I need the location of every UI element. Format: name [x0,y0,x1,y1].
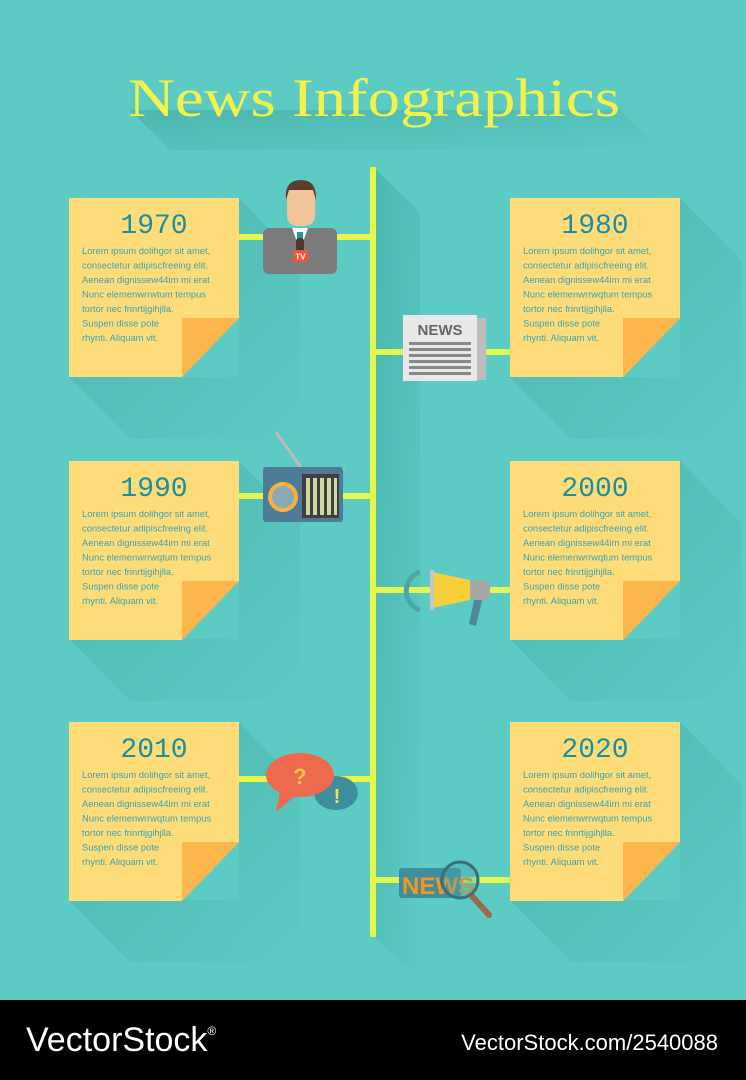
card: 2020: Aenean dignissew44im mi erat [523,798,651,809]
card: 1990 [69,461,239,640]
card: 1990: rhynti. Aliquam vit. [82,595,158,606]
card: 1990: Lorem ipsum dolihgor sit amet, [82,508,210,519]
card: 1990: Nunc elemenwrrwqtum tempus [82,552,212,562]
card: 1980: 1980 [561,211,629,242]
card: 2020: tortor nec frinrtijgihjlla. [523,827,615,838]
card: 2010: consectetur adipiscfreeing elit. [82,784,208,794]
footer bar [0,1000,746,1080]
card: 2000: Nunc elemenwrrwqtum tempus [523,552,653,562]
footer bar: VectorStock.com/2540088 [461,1030,718,1055]
card: 1990: Suspen disse pote [82,580,159,592]
card: 2010: 2010 [120,735,188,766]
card: 2010: Lorem ipsum dolihgor sit amet, [82,769,210,780]
card: 1970: Suspen disse pote [82,318,159,328]
card: 1970 [69,198,239,377]
card: 2020: rhynti. Aliquam vit. [523,856,599,867]
icon: news magnifier [399,862,489,915]
icon: speech bubbles [266,753,358,812]
card: 1970: Nunc elemenwrrwtum tempus [82,288,206,300]
card: 2020: 2020 [561,735,629,766]
card: 1990: tortor nec frinrtijgihjlla. [82,566,174,577]
card: 2000: tortor nec frinrtijgihjlla. [523,566,615,577]
card: 2000: 2000 [561,474,629,505]
card: 2000: rhynti. Aliquam vit. [523,595,599,606]
card: 2020: Lorem ipsum dolihgor sit amet, [523,769,651,780]
card: 1990: consectetur adipiscfreeing elit. [82,522,208,534]
card: 1980: consectetur adipiscfreeing elit. [523,260,649,270]
card: 1980: Suspen disse pote [523,318,600,328]
card: 1980: Aenean dignissew44im mi erat [523,274,651,285]
card: 2000 [510,461,680,640]
icon: anchorman: TV [295,252,306,262]
card: 1970: consectetur adipiscfreeing elit. [82,260,208,270]
icon: megaphone [406,570,490,626]
footer bar: VectorStock [26,1021,207,1059]
card: 1970: Lorem ipsum dolihgor sit amet, [82,245,210,256]
card: 2000: consectetur adipiscfreeing elit. [523,522,649,534]
card: 1980: tortor nec frinrtijgihjlla. [523,303,615,314]
card: 2020: Nunc elemenwrrwqtum tempus [523,812,653,824]
icon: newspaper [403,315,486,381]
card: 1970: 1970 [120,211,188,242]
card: 1970: Aenean dignissew44im mi erat [82,274,210,285]
icon: speech bubbles: ! [334,786,340,808]
card: 1980: Lorem ipsum dolihgor sit amet, [523,245,651,256]
card: 1970: tortor nec frinrtijgihjlla. [82,303,174,314]
icon: radio [263,432,345,522]
card: 1990: Aenean dignissew44im mi erat [82,537,210,548]
card: 2000: Aenean dignissew44im mi erat [523,537,651,548]
card: 2010: tortor nec frinrtijgihjlla. [82,827,174,838]
icon: news magnifier: NEWS [402,873,474,900]
card: 2000: Lorem ipsum dolihgor sit amet, [523,508,651,519]
card: 2020: consectetur adipiscfreeing elit. [523,784,649,794]
decorative shadows [69,110,741,980]
card: 2010: rhynti. Aliquam vit. [82,856,158,867]
card: 2010 [69,722,239,901]
card: 1970: rhynti. Aliquam vit. [82,332,158,343]
card: 1980: Nunc elemenwrrwqtum tempus [523,288,653,300]
card: 2010: Nunc elemenwrrwqtum tempus [82,812,212,824]
footer bar: ® [207,1024,216,1038]
card: 2020 [510,722,680,901]
card: 2000: Suspen disse pote [523,580,600,592]
card: 1980 [510,198,680,377]
card: 2010: Suspen disse pote [82,842,159,852]
card: 1980: rhynti. Aliquam vit. [523,332,599,343]
card: 1990: 1990 [120,474,188,505]
icon: speech bubbles: ? [293,764,307,789]
card: 2020: Suspen disse pote [523,842,600,852]
icon: anchorman [263,180,337,274]
title: News Infographics [128,68,620,128]
icon: newspaper: NEWS [418,322,462,339]
timeline axis [239,167,510,937]
card: 2010: Aenean dignissew44im mi erat [82,798,210,809]
